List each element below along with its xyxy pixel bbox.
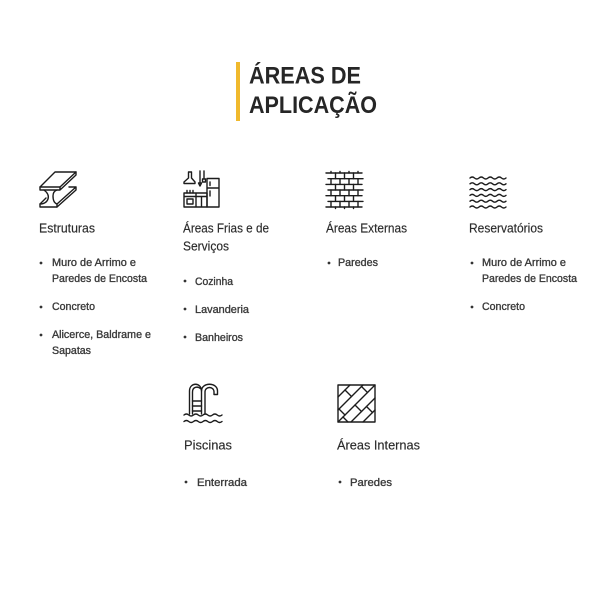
list (40, 257, 151, 357)
title (236, 62, 377, 121)
list: Muro de Arrimo e (482, 257, 566, 269)
list: Paredes (350, 477, 392, 489)
list: Muro de Arrimo e (52, 257, 136, 269)
list: Alicerce, Baldrame e (52, 329, 151, 341)
panel: Estruturas (39, 172, 151, 357)
panel: Áreas Frias e de Serviços: Serviços (183, 238, 229, 254)
list: Paredes de Encosta (52, 273, 148, 285)
heading: Áreas Externas (326, 220, 407, 236)
list (184, 276, 250, 344)
panel: Áreas Internas (337, 385, 420, 489)
title: ÁREAS DE (249, 62, 361, 90)
list: Banheiros (195, 332, 243, 344)
list: Paredes de Encosta (482, 273, 578, 285)
list: Sapatas (52, 345, 91, 357)
heading: Áreas Internas (337, 438, 420, 452)
heading: Estruturas (39, 220, 95, 236)
list: Concreto (52, 301, 95, 313)
heading: Áreas Frias e de (183, 220, 269, 236)
list: Concreto (482, 301, 525, 313)
list (471, 257, 578, 313)
heading: Reservatórios (469, 220, 543, 236)
icon: kitchen (184, 171, 219, 207)
panel: Reservatórios (469, 177, 578, 313)
list: Enterrada (197, 477, 248, 489)
panel: Áreas Externas (326, 172, 407, 269)
panel: Áreas Frias e de Serviços (183, 171, 269, 344)
icon: steel beam (40, 172, 76, 207)
heading: Piscinas (184, 438, 232, 452)
list: Paredes (338, 257, 378, 269)
icon: parquet floor (338, 385, 375, 422)
list: Lavanderia (195, 304, 250, 316)
panel: Piscinas (184, 384, 248, 489)
icon: brick wall (326, 172, 363, 208)
title: APLICAÇÃO (249, 91, 377, 119)
icon: pool ladder (184, 384, 222, 422)
list: Cozinha (195, 276, 234, 288)
icon: water waves (470, 177, 506, 208)
